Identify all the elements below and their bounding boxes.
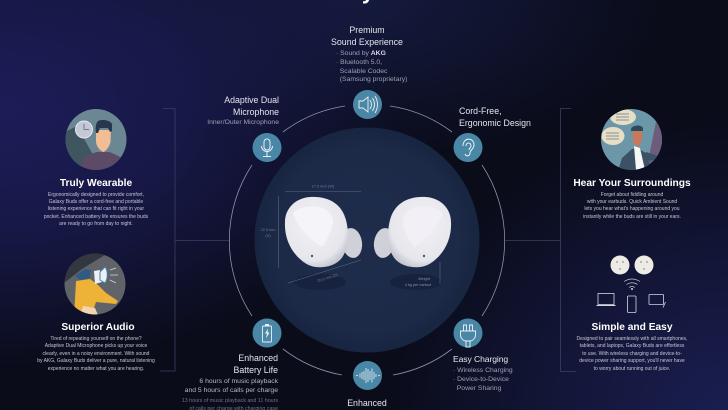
body: truly wearable: Galaxy Buds offer a cord-free and portable	[49, 199, 143, 205]
heading: easy charging: Easy Charging	[453, 354, 508, 364]
body: truly wearable: are ready to go from day to night.	[59, 221, 133, 227]
body: superior audio: by AKG, Galaxy Buds deliver a pure, natural listening	[37, 358, 155, 364]
heading: enhanced battery life	[234, 353, 278, 375]
heading: premium sound experience: Sound Experience	[331, 37, 403, 47]
central earbuds with dimensions: (H)	[265, 234, 271, 238]
text: battery hours	[184, 378, 278, 394]
icon: plug	[454, 318, 482, 348]
body: simple and easy: tablets, and laptops, Galaxy Buds are effortless	[580, 343, 684, 349]
body: truly wearable: pocket. Enhanced battery life ensures the buds	[44, 214, 148, 220]
list: sound specs: · Sound by AKG	[336, 50, 386, 57]
body: simple and easy: device power sharing support, you'll never have	[579, 358, 685, 364]
text: battery hours: 6 hours of music playback	[199, 378, 278, 385]
ring arcs	[229, 106, 505, 375]
central earbuds with dimensions: 22.5 mm	[261, 228, 275, 232]
heading: premium sound experience: Premium	[349, 25, 385, 35]
body: superior audio: experience no matter what you are hearing.	[48, 366, 144, 372]
heading: hear your surroundings: Hear Your Surroundings	[573, 178, 691, 189]
heading: premium sound experience	[331, 25, 403, 47]
list: sound specs	[336, 50, 407, 83]
list: charging	[453, 367, 513, 392]
illustration: hear your surroundings	[601, 109, 664, 171]
central earbuds with dimensions: 20.6 mm (D)	[317, 273, 339, 283]
text: battery with case	[182, 398, 278, 410]
heading: cord-free ergonomic design	[459, 106, 531, 128]
illustration: earbuds and devices	[596, 256, 666, 312]
list: sound specs: Scalable Codec	[340, 68, 387, 75]
heading: adaptive dual microphone	[224, 95, 279, 117]
central disc	[254, 128, 480, 352]
left bracket	[160, 108, 230, 371]
heading: enhanced: Enhanced	[347, 398, 387, 408]
illustration: truly wearable	[65, 109, 127, 171]
body: hear your surroundings: Forget about fiddling around	[601, 192, 663, 198]
body: simple and easy: to use. With wireless charging and device-to-	[582, 351, 682, 357]
heading: enhanced battery life: Enhanced	[238, 353, 278, 363]
body: simple and easy: to worry about running out of juice.	[594, 366, 670, 372]
heading: cord-free ergonomic design: Ergonomic Design	[459, 118, 531, 128]
central earbuds with dimensions: Weight	[418, 277, 431, 281]
body: superior audio: clearly, even in a noisy environment. With sound	[43, 351, 149, 357]
body: simple and easy	[576, 336, 687, 372]
icon: speaker	[353, 90, 382, 119]
icon: ear	[454, 133, 482, 162]
list: sound specs: · Bluetooth 5.0,	[336, 59, 382, 66]
body: simple and easy: Designed to pair seamlessly with all smartphones,	[577, 336, 687, 342]
central earbuds with dimensions: 4 kg per earbud	[405, 283, 431, 287]
body: hear your surroundings: with your earbuds. Quick Ambient Sound	[587, 199, 677, 205]
icon: battery	[252, 318, 282, 348]
central earbuds with dimensions	[261, 184, 451, 290]
heading: adaptive dual microphone: Adaptive Dual	[224, 95, 279, 105]
body: superior audio: Adaptive Dual Microphone picks up your voice	[45, 343, 147, 349]
text: battery hours: and 5 hours of calls per charge	[185, 387, 278, 394]
heading: cord-free ergonomic design: Cord-Free,	[459, 106, 502, 116]
text: battery with case: 13 hours of music playback and 11 hours	[182, 398, 278, 404]
body: hear your surroundings: lets you hear what's happening around you	[584, 206, 680, 212]
list: charging: Power Sharing	[457, 385, 501, 392]
heading: adaptive dual microphone: Microphone	[233, 107, 279, 117]
list: sound specs: (Samsung proprietary)	[340, 76, 407, 83]
body: truly wearable: Ergonomically designed to provide comfort,	[48, 192, 144, 198]
body: superior audio	[37, 336, 155, 372]
heading: simple and easy: Simple and Easy	[592, 322, 672, 333]
heading: truly wearable: Truly Wearable	[60, 178, 132, 189]
subtext: microphone: Inner/Outer Microphone	[207, 119, 279, 126]
body: superior audio: Tired of repeating yourself on the phone?	[50, 336, 142, 342]
right bracket	[505, 108, 576, 372]
list: charging: · Device-to-Device	[453, 376, 509, 383]
icon: sound wave	[353, 361, 382, 390]
body: truly wearable	[44, 192, 148, 227]
illustration: superior audio	[64, 253, 126, 317]
body: hear your surroundings: instantly while the buds are still in your ears.	[583, 214, 681, 220]
body: hear your surroundings	[583, 192, 681, 220]
heading: enhanced battery life: Battery Life	[234, 365, 278, 375]
body: truly wearable: listening experience that can fit right in your	[48, 206, 144, 212]
central earbuds with dimensions: 17.5 inch (W)	[312, 184, 335, 188]
list: charging: · Wireless Charging	[453, 367, 513, 374]
icon: microphone	[252, 133, 282, 162]
heading: superior audio: Superior Audio	[61, 322, 135, 333]
